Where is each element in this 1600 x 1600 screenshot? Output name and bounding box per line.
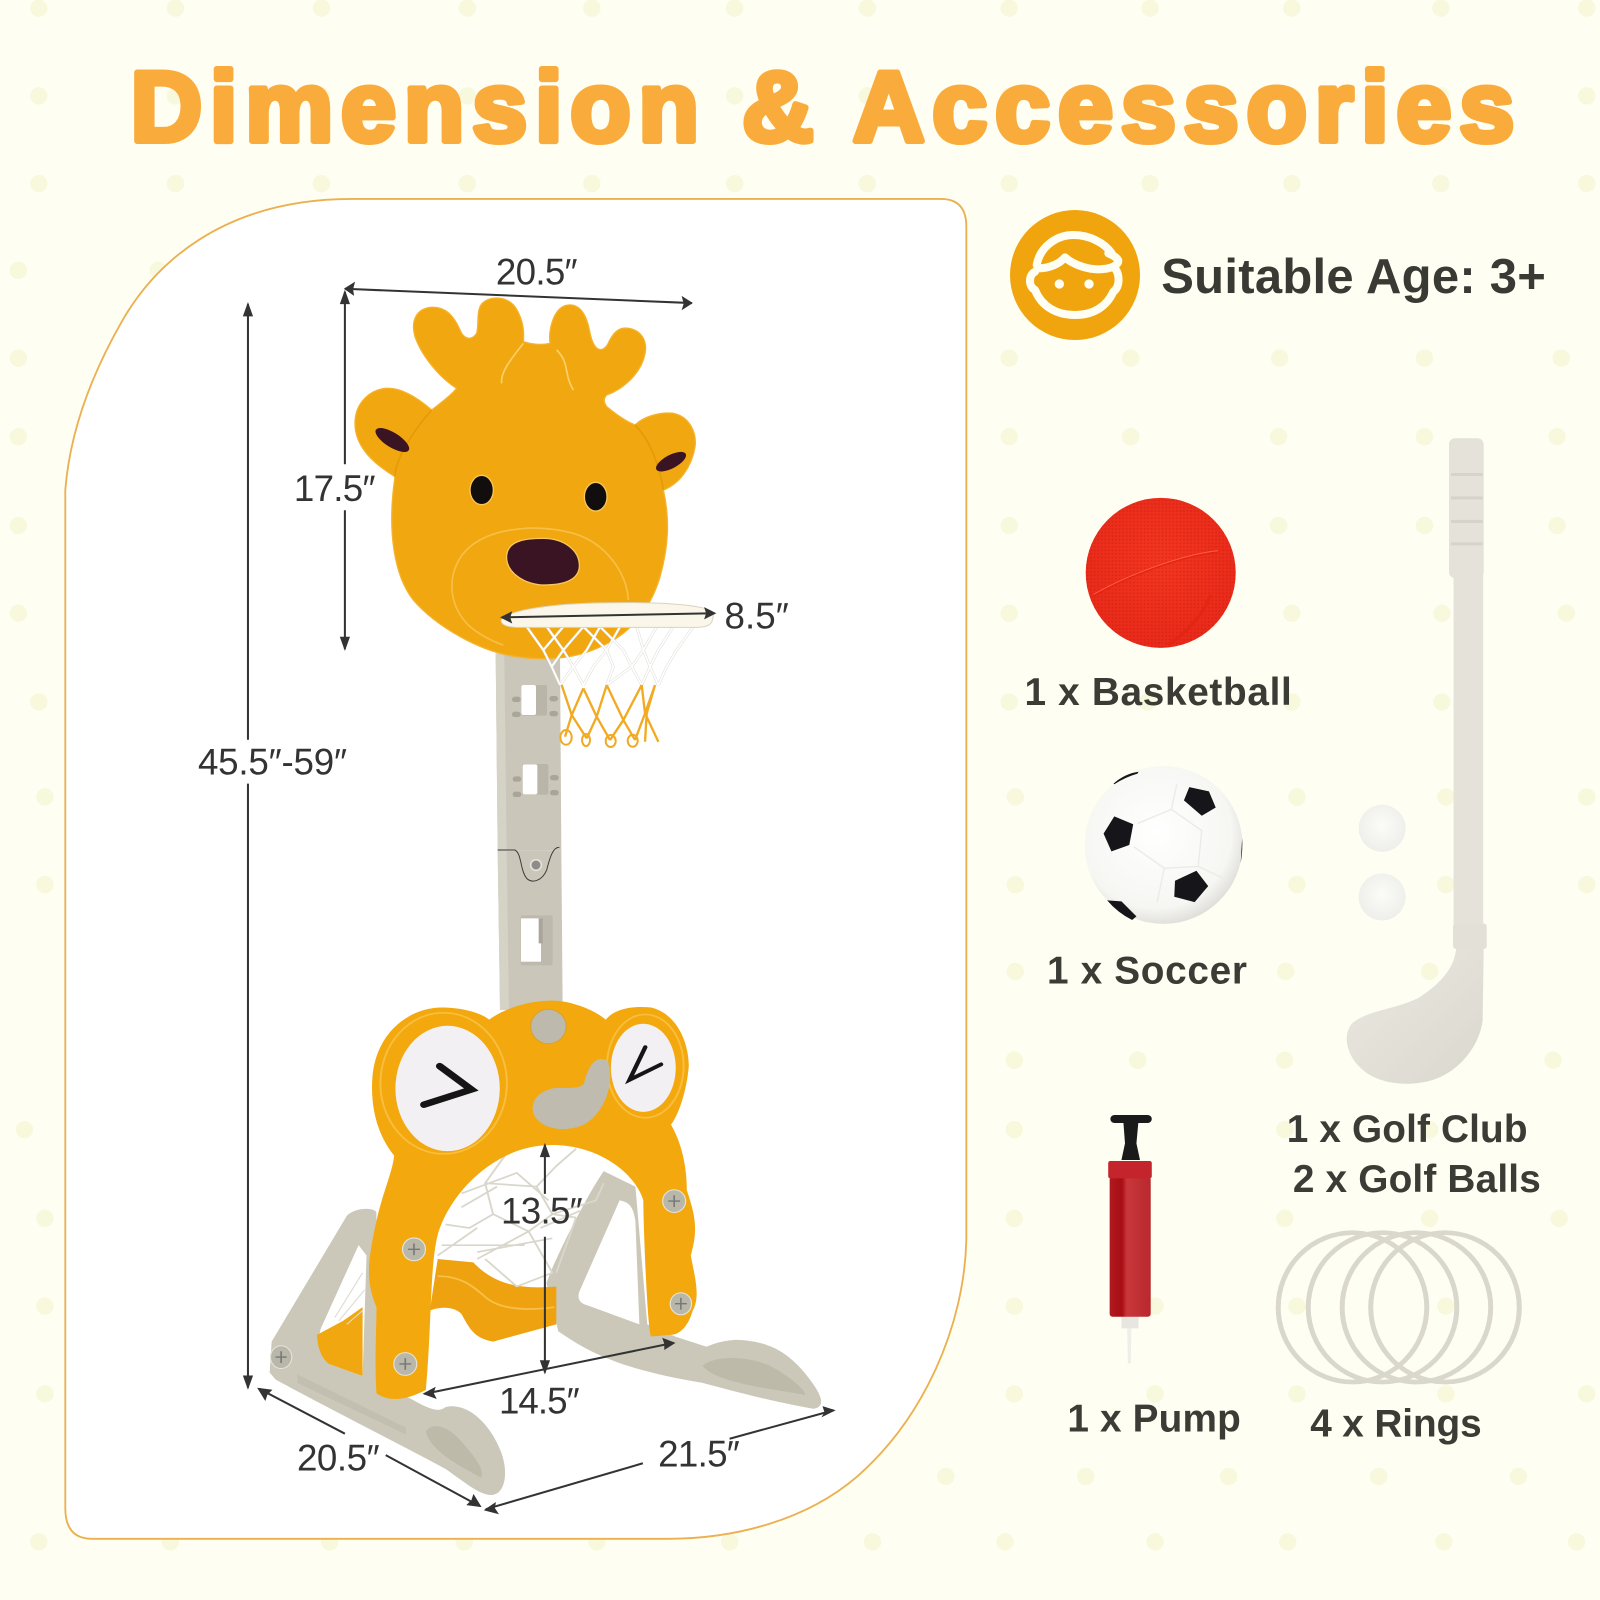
orange arch bbox=[369, 1001, 697, 1399]
icon: nose bbox=[507, 538, 579, 585]
dimension: backboard height: 17.5″ bbox=[294, 468, 376, 509]
dimension: goal width: 14.5″ bbox=[499, 1380, 580, 1421]
icon: left target bbox=[395, 1026, 500, 1151]
goal net bbox=[438, 1149, 604, 1287]
dimension: goal height: 13.5″ bbox=[501, 1190, 583, 1231]
goal net back bbox=[438, 1145, 643, 1290]
suitable age text: Suitable Age: 3+ bbox=[1161, 250, 1546, 304]
orange goal tray bbox=[430, 1259, 556, 1342]
basketball label: 1 x Basketball bbox=[1024, 671, 1292, 714]
icon: ear holes bbox=[372, 424, 689, 475]
icon: golf club bbox=[1347, 438, 1487, 1084]
dimension: overall height: 45.5″-59″ bbox=[198, 741, 347, 782]
icon: grey button bbox=[531, 1009, 566, 1044]
golf label: 1 x Golf Club bbox=[1287, 1108, 1528, 1151]
dimension: backboard width bbox=[344, 252, 693, 310]
dimension: rim diameter bbox=[500, 596, 789, 637]
pole bbox=[496, 653, 563, 1010]
rings label: 4 x Rings bbox=[1310, 1403, 1482, 1446]
dimension: goal height bbox=[501, 1143, 583, 1374]
hoop net bbox=[527, 627, 693, 747]
icon: child face bbox=[1010, 210, 1140, 340]
icon: eyes bbox=[470, 475, 607, 511]
dimension: overall height bbox=[198, 302, 347, 1390]
left grey frame bbox=[270, 1209, 505, 1495]
dimension: base width: 21.5″ bbox=[658, 1433, 740, 1474]
golf label: 2 x Golf Balls bbox=[1293, 1158, 1541, 1201]
icon: right target bbox=[611, 1024, 676, 1112]
dimension: backboard height bbox=[294, 290, 376, 651]
icon: rings bbox=[1278, 1233, 1519, 1382]
dimension: base depth bbox=[257, 1388, 482, 1507]
icon: hook bbox=[533, 1059, 610, 1129]
dimension: backboard width: 20.5″ bbox=[496, 252, 578, 293]
golf label bbox=[1287, 1108, 1541, 1201]
icon: screws bbox=[270, 1190, 692, 1375]
dimension: goal width bbox=[422, 1338, 676, 1421]
right grey frame bbox=[546, 1171, 821, 1409]
pump label: 1 x Pump bbox=[1067, 1398, 1241, 1441]
dimension: base width bbox=[484, 1406, 836, 1514]
icon: golf balls bbox=[1359, 805, 1406, 920]
dimension: rim diameter: 8.5″ bbox=[724, 596, 789, 637]
panel: dimensions bbox=[65, 199, 966, 1539]
hoop rim bbox=[501, 603, 713, 627]
dimension: base depth: 20.5″ bbox=[297, 1437, 380, 1478]
icon: pump bbox=[1108, 1115, 1152, 1363]
icon: soccer ball bbox=[1085, 766, 1242, 924]
soccer label: 1 x Soccer bbox=[1047, 950, 1247, 993]
icon: basketball bbox=[1086, 498, 1236, 648]
deer head backboard bbox=[355, 298, 713, 747]
goal base bbox=[270, 1001, 821, 1495]
title: Dimension & Accessories bbox=[131, 51, 1514, 162]
